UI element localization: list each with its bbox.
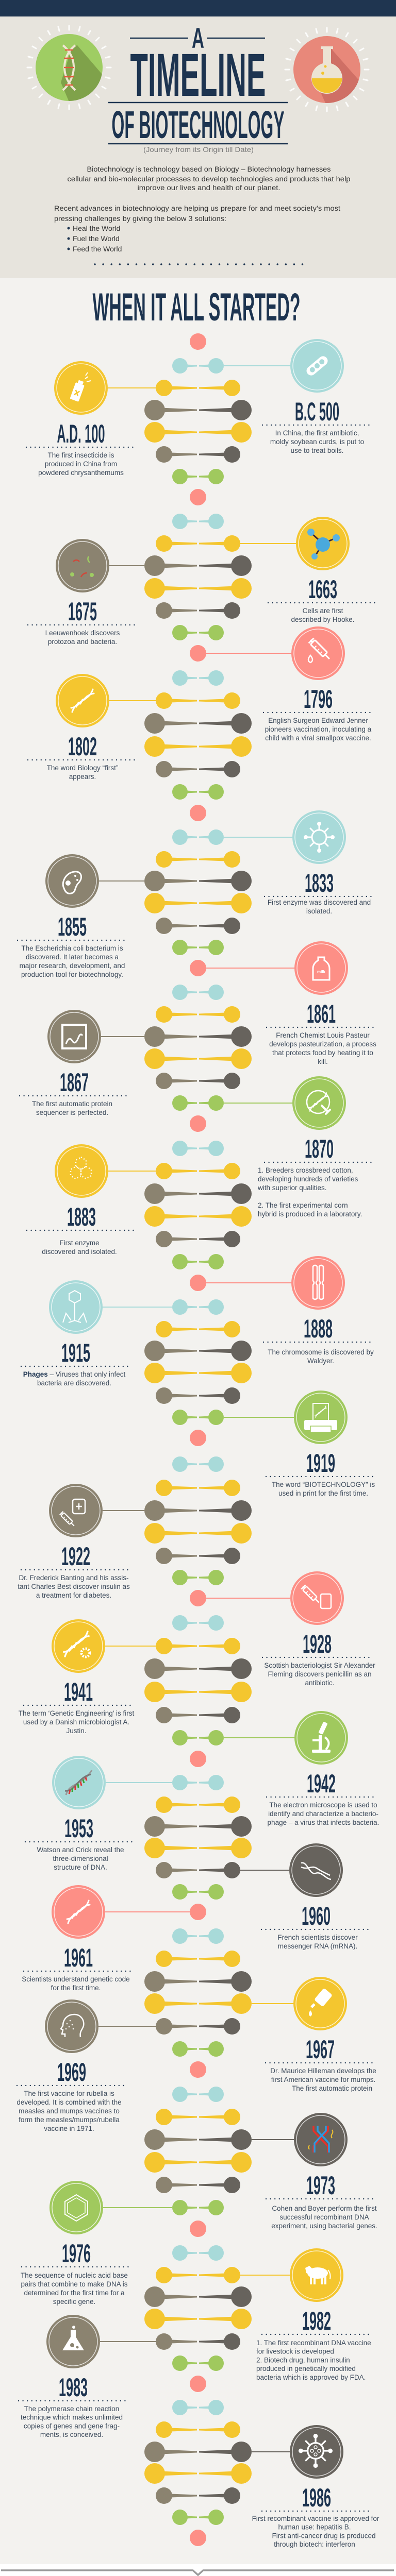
event: 1967: first American vaccine for mumps. (271, 2076, 375, 2083)
event: 1976: pairs that combine to make DNA is (21, 2280, 128, 2288)
event: 1870: with superior qualities. (257, 1184, 327, 1192)
event: 1915: Phages – Viruses that only infect (23, 1370, 125, 1378)
subtitle: (Journey from its Origin till Date) (143, 145, 254, 154)
event: 1855: discovered. It later becomes a (26, 953, 119, 961)
event: 1976: 1976 (62, 2239, 91, 2268)
event: 1953 (25, 1756, 172, 1871)
event: 1942: identify and characterize a bacterio- (268, 1810, 378, 1818)
event: 1796: English Surgeon Edward Jenner (268, 717, 368, 724)
event: 1833 (224, 810, 374, 915)
event: 1982: 1982 (302, 2307, 331, 2335)
event: B.C 500: B.C 500 (295, 397, 339, 426)
event: 1883: 1883 (67, 1202, 96, 1231)
event: 1888: Waldyer. (307, 1357, 334, 1365)
event: 1855: 1855 (58, 912, 87, 941)
event: 1922: tant Charles Best discover insulin as (18, 1583, 130, 1590)
event: 1982: 2. Biotech drug, human insulin (256, 2356, 350, 2364)
event: 1915: 1915 (61, 1338, 90, 1367)
title: A (192, 22, 204, 54)
event: 1833: isolated. (306, 907, 332, 915)
title (108, 22, 288, 146)
event: 1928: Fleming discovers penicillin as an (268, 1670, 372, 1678)
event: 1867 (20, 1010, 144, 1116)
event: 1953: 1953 (64, 1814, 93, 1843)
event: 1942: 1942 (307, 1769, 336, 1798)
event: 1986 (252, 2425, 380, 2548)
event: 1969: vaccine in 1971. (44, 2125, 94, 2132)
event: 1967: 1967 (306, 2035, 335, 2064)
event: A.D. 100: A.D. 100 (57, 419, 105, 448)
event: 1928: Scottish bacteriologist Sir Alexander (264, 1662, 375, 1669)
event: 1928: antibiotic. (305, 1679, 335, 1687)
event: 1663 (240, 517, 377, 623)
event: 1973 (252, 2113, 377, 2230)
event: 1961 (22, 1885, 190, 1992)
event: 1855 (18, 854, 144, 978)
event: 1861: kill. (318, 1058, 328, 1065)
intro paragraph: improve our lives and health of our planet. (137, 184, 280, 192)
event: 1976: The sequence of nucleic acid base (21, 2272, 128, 2279)
event: 1870: 1. Breeders crossbreed cotton, (258, 1166, 353, 1174)
event: 1802 (28, 674, 156, 781)
solutions list (67, 224, 122, 253)
event: 1986: 1986 (302, 2483, 331, 2512)
event: B.C 500: moldy soybean curds, is put to (270, 438, 364, 446)
event: 1976 (21, 2181, 172, 2306)
event: 1796 (206, 626, 373, 742)
event: 1922: Dr. Frederick Banting and his assis- (19, 1574, 129, 1582)
event: 1986: human use: hepatitis B. (278, 2523, 351, 2531)
event: 1983: copies of genes and gene frag- (24, 2422, 120, 2430)
solutions list: Feed the World (73, 245, 122, 253)
event: 1663: Cells are first (303, 607, 343, 615)
event: 1867: The first automatic protein (32, 1100, 112, 1108)
event: 1861: French Chemist Louis Pasteur (276, 1031, 370, 1039)
event: 1861: milk (317, 970, 326, 974)
intro paragraph: Biotechnology is technology based on Biology – Biotechnology harnesses (87, 165, 331, 173)
event: 1919: The word “BIOTECHNOLOGY” is (272, 1481, 375, 1488)
event: 1802: The word Biology “first” (47, 764, 118, 772)
event: A.D. 100: produced in China from (45, 460, 117, 468)
intro paragraph: pressing challenges by giving the below 3 solutions: (54, 215, 226, 223)
footer (0, 2564, 396, 2576)
event: 1833: 1833 (305, 869, 334, 897)
event: 1883: discovered and isolated. (42, 1248, 117, 1256)
event: 1870: developing hundreds of varieties (258, 1175, 358, 1183)
event: 1928 (206, 1571, 375, 1687)
event: 1915 (21, 1280, 172, 1387)
event: 1919: used in print for the first time. (278, 1489, 368, 1497)
event: 1942: phage – a virus that infects bacteria. (268, 1819, 379, 1826)
event: 1883: First enzyme (59, 1239, 100, 1247)
event: 1796: 1796 (304, 685, 333, 714)
event: 1922: a treatment for diabetes. (36, 1591, 111, 1599)
event: 1861: develops pasteurization, a process (269, 1040, 376, 1048)
event: 1969: The first vaccine for rubella is (24, 2090, 114, 2097)
event: 1976: determined for the first time for a (24, 2289, 125, 2297)
event: 1922 (18, 1484, 144, 1599)
event: 1855: major research, development, and (20, 962, 125, 970)
top navy bar (0, 0, 396, 16)
event: 1953: Watson and Crick reveal the (37, 1846, 124, 1854)
event: 1942 (224, 1711, 379, 1826)
event: 1833: First enzyme was discovered and (268, 899, 371, 906)
event: 1986: First anti-cancer drug is produced (272, 2532, 376, 2539)
event: 1969: form the measles/mumps/rubella (19, 2116, 120, 2124)
intro paragraph: cellular and bio-molecular processes to develop technologies and products that help (67, 175, 351, 183)
event: 1915: bacteria are discovered. (37, 1379, 111, 1387)
event: 1870: hybrid is produced in a laboratory. (258, 1210, 362, 1218)
event: 1983: ments, is conceived. (40, 2431, 103, 2438)
event: A.D. 100 (26, 361, 156, 477)
event: 1967: The first automatic protein (292, 2084, 372, 2092)
intro paragraph (54, 165, 351, 223)
event: A.D. 100: powdered chrysanthemums (38, 469, 124, 477)
event: 1861: 1861 (307, 999, 336, 1028)
event: 1960: French scientists discover (277, 1934, 358, 1941)
event: 1675 (28, 539, 144, 646)
event: 1953: structure of DNA. (54, 1863, 107, 1871)
event: 1855: The Escherichia coli bacterium is (21, 944, 123, 952)
event: 1969: developed. It is combined with the (16, 2098, 122, 2106)
header background (0, 0, 396, 278)
event: 1967 (252, 1977, 376, 2092)
event: 1941: 1941 (64, 1677, 93, 1706)
event: 1982: bacteria which is approved by FDA. (256, 2374, 366, 2381)
event: 1982: 1. The first recombinant DNA vaccine (256, 2339, 371, 2347)
event: 1941 (19, 1619, 156, 1735)
event: 1983 (19, 2315, 156, 2438)
event: 1983: 1983 (59, 2373, 88, 2402)
event: 1855: production tool for biotechnology. (21, 971, 123, 978)
event: 1675: 1675 (68, 597, 97, 626)
intro paragraph: Recent advances in biotechnology are helping us prepare for and meet society’s most (54, 205, 340, 212)
event: 1802: appears. (69, 773, 96, 781)
event: 1928: 1928 (303, 1630, 332, 1658)
event: 1802: 1802 (68, 732, 97, 761)
event: B.C 500 (224, 339, 372, 454)
event: 1942: The electron microscope is used to (269, 1801, 377, 1809)
solutions list: Fuel the World (73, 234, 120, 243)
event: 1941: The term ‘Genetic Engineering’ is first (19, 1709, 135, 1717)
event: 1976: specific gene. (53, 2298, 95, 2306)
event: 1870: 1870 (305, 1134, 334, 1163)
event: 1870 (224, 1076, 374, 1218)
event: 1967: Dr. Maurice Hilleman develops the (270, 2067, 376, 2075)
event: 1675: protozoa and bacteria. (48, 638, 117, 646)
event: 1973: 1973 (306, 2171, 335, 2200)
event: 1960 (240, 1843, 371, 1950)
event: 1986: First recombinant vaccine is approved for (252, 2515, 380, 2522)
event: B.C 500: In China, the first antibiotic, (275, 429, 359, 437)
event: 1883 (27, 1144, 156, 1256)
event: 1919: 1919 (306, 1449, 335, 1478)
event: B.C 500: use to treat boils. (291, 447, 343, 454)
event: 1796: child with a viral smallpox vaccine. (265, 734, 371, 742)
event: 1953: three-dimensional (53, 1855, 108, 1862)
DNA helix (144, 333, 252, 2546)
event: 1870: 2. The first experimental corn (258, 1201, 348, 1209)
solutions list: Heal the World (73, 224, 120, 232)
event: 1941: used by a Danish microbiologist A. (23, 1718, 129, 1726)
event: 1861: that protects food by heating it to (272, 1049, 373, 1057)
event: 1969: 1969 (57, 2058, 86, 2087)
event: A.D. 100: The first insecticide is (47, 451, 114, 459)
event: 1663: 1663 (308, 575, 337, 604)
icon: flask badge (header right) (285, 28, 371, 113)
event: 1919 (224, 1391, 375, 1497)
event: 1969 (16, 1999, 156, 2132)
event: 1982: for livestock is developed (256, 2348, 334, 2355)
event: 1663: described by Hooke. (291, 616, 355, 623)
event: 1867: 1867 (60, 1068, 89, 1097)
event: 1941: Justin. (66, 1727, 87, 1735)
event: 1888: 1888 (304, 1314, 333, 1343)
event: 1867: sequencer is perfected. (36, 1109, 108, 1116)
event: 1961: 1961 (64, 1943, 93, 1972)
event: 1861 (206, 941, 376, 1065)
event: 1960: messenger RNA (mRNA). (278, 1942, 357, 1950)
event: 1888 (206, 1256, 374, 1365)
event: 1986: through biotech: interferon (274, 2540, 355, 2548)
event: 1973: successful recombinant DNA (279, 2213, 369, 2221)
event: 1961: Scientists understand genetic code (22, 1975, 130, 1983)
event: 1969: measles and mumps vaccines to (19, 2107, 120, 2115)
event: 1922: 1922 (61, 1542, 90, 1571)
event: 1888: The chromosome is discovered by (268, 1348, 374, 1356)
event: 1983: technique which makes unlimited (21, 2414, 123, 2421)
event: 1982: produced in genetically modified (256, 2365, 356, 2372)
event: 1973: Cohen and Boyer perform the first (272, 2205, 377, 2212)
event: 1796: pioneers vaccination, inoculating a (265, 725, 372, 733)
event: 1675: Leeuwenhoek discovers (45, 629, 120, 637)
event: 1983: The polymerase chain reaction (24, 2405, 119, 2413)
event: 1961: for the first time. (51, 1984, 101, 1992)
icon: DNA badge (header left) (27, 26, 113, 113)
event: 1973: experiment, using bacterial genes. (271, 2222, 377, 2230)
event: 1982 (240, 2248, 371, 2381)
event: 1960: 1960 (302, 1902, 331, 1930)
